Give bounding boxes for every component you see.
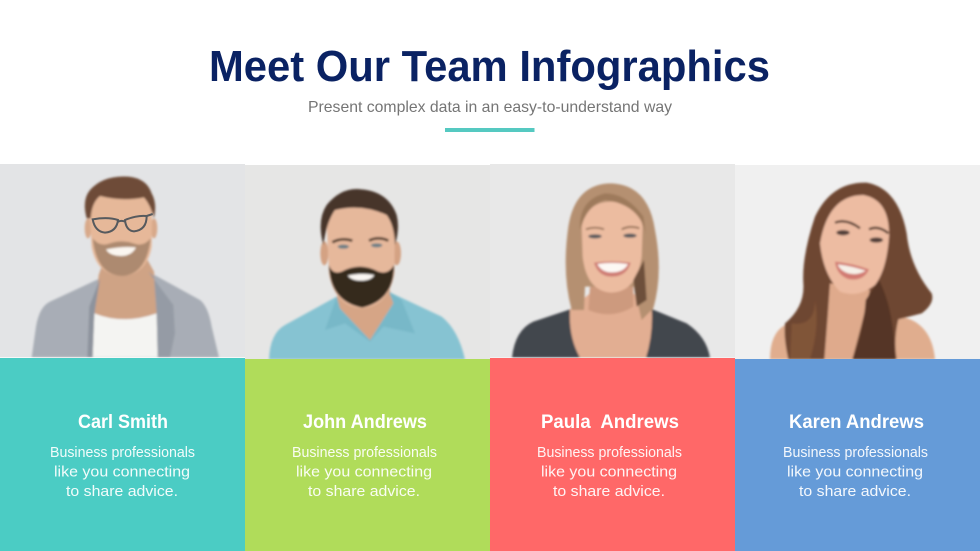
description: Carl Smith: Business professionals — [50, 445, 195, 461]
description: John Andrews: to share advice. — [308, 484, 420, 500]
title: Meet Our Team Infographics — [209, 42, 770, 91]
description: Karen Andrews — [783, 445, 928, 500]
description: Karen Andrews: like you connecting — [787, 464, 923, 480]
portrait: John Andrews — [245, 165, 490, 359]
panel: Karen Andrews — [735, 359, 980, 551]
portrait: Karen Andrews — [735, 165, 980, 359]
description: Karen Andrews: to share advice. — [799, 484, 911, 500]
subtitle: Present complex data in an easy-to-understand way — [308, 99, 672, 116]
description: Paula Andrews: like you connecting — [541, 464, 677, 480]
description: John Andrews — [292, 445, 437, 500]
description: John Andrews: Business professionals — [292, 445, 437, 461]
description: Paula Andrews: to share advice. — [553, 484, 665, 500]
panel: John Andrews — [245, 359, 490, 551]
name: Karen Andrews: Karen Andrews — [789, 412, 924, 433]
portrait: Paula Andrews — [490, 164, 735, 358]
description: Carl Smith: like you connecting — [54, 464, 190, 480]
description: John Andrews: like you connecting — [296, 464, 432, 480]
name: Paula Andrews: Paula Andrews — [541, 412, 679, 433]
accent underline — [445, 128, 534, 132]
portrait: Carl Smith — [0, 164, 245, 357]
name: John Andrews: John Andrews — [303, 412, 427, 433]
panel: Paula Andrews — [490, 358, 735, 551]
description: Carl Smith — [50, 445, 195, 500]
name: Carl Smith: Carl Smith — [78, 412, 168, 433]
description: Paula Andrews — [537, 445, 682, 500]
description: Karen Andrews: Business professionals — [783, 445, 928, 461]
panel: Carl Smith — [0, 358, 245, 551]
description: Paula Andrews: Business professionals — [537, 445, 682, 461]
description: Carl Smith: to share advice. — [66, 484, 178, 500]
